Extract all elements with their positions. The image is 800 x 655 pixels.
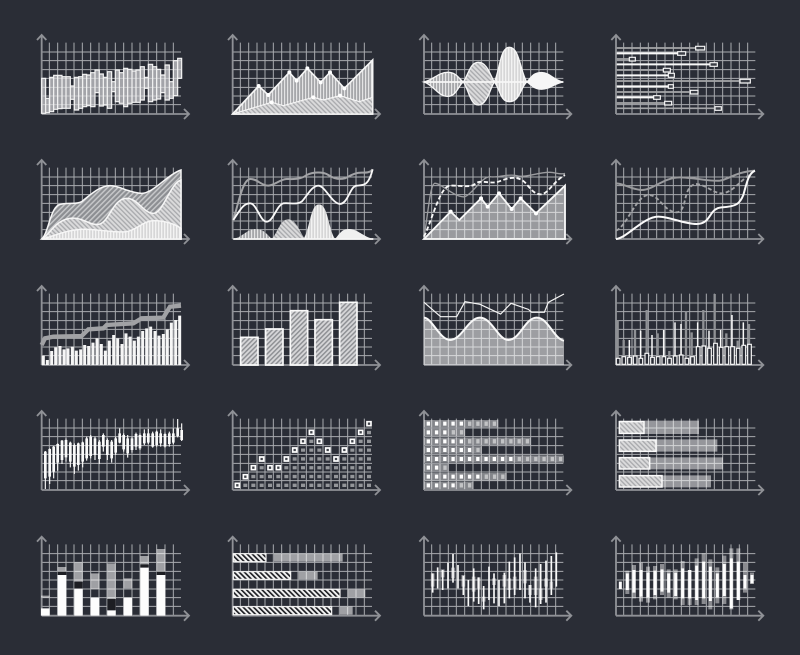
chart: waves with thin line (419, 286, 571, 370)
chart: hollow box bars (37, 35, 189, 119)
chart: stacked smooth areas (37, 160, 189, 244)
chart: dot matrix columns (228, 411, 380, 495)
chart: progress bars with hatched fill (611, 411, 763, 495)
chart: three smooth trend lines (611, 160, 763, 244)
chart: symmetric wave blobs (419, 35, 571, 119)
chart: volatile wicks (419, 537, 571, 621)
chart: candle columns with tall wicks (611, 286, 763, 370)
chart: horizontal lollipop ranges (611, 35, 763, 119)
chart: horizontal dot strips (419, 411, 571, 495)
chart: stacked columns with gaps (37, 537, 189, 621)
chart: gantt bars (228, 537, 380, 621)
chart: layered hatched area with peaks (228, 35, 380, 119)
chart: five hatched columns (228, 286, 380, 370)
chart: symmetric volume bars (611, 537, 763, 621)
chart: bars with gray stepped trend (37, 286, 189, 370)
chart: filled peaks with dashed lines (419, 160, 571, 244)
chart: curves and humps (228, 160, 380, 244)
chart: rising candlesticks (37, 411, 189, 495)
